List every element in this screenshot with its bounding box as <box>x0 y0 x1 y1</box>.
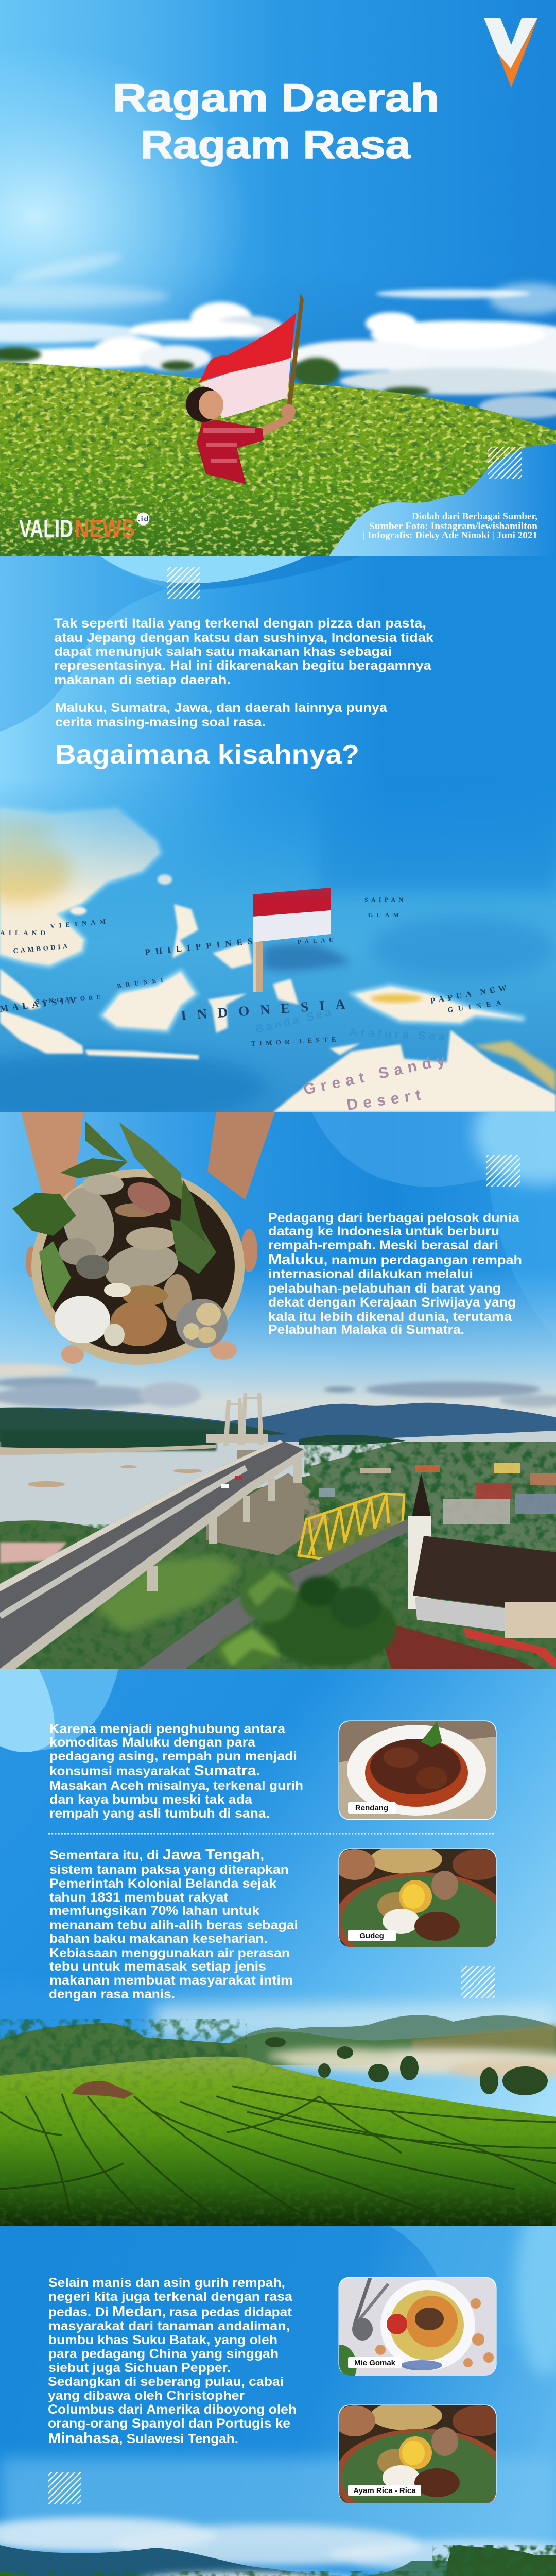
intro text: dapat menunjuk salah satu makanan khas sebagai <box>54 645 392 659</box>
foreground palms <box>216 1566 396 1669</box>
text: medan and minahasa: Sedangkan di seberang pulau, cabai <box>48 2375 284 2389</box>
card: ayam rica-rica <box>334 2401 509 2527</box>
card: mie gomak <box>339 2277 496 2376</box>
stripes <box>167 567 200 599</box>
map labels: Arafura Sea <box>349 1025 446 1043</box>
map labels: PALAU <box>297 936 334 945</box>
text: medan and minahasa: Columbus dari Amerika diboyong oleh <box>48 2402 297 2417</box>
credit text: | Infografis: Dieky Ade Ninoki | Juni 2021 <box>363 530 537 541</box>
clouds <box>0 2517 556 2571</box>
label: mie gomak: Mie Gomak <box>354 2359 396 2367</box>
ginger and spices <box>55 1174 228 1348</box>
text: medan and minahasa: yang dibawa oleh Christopher <box>48 2388 245 2403</box>
text: medan and minahasa: masyarakat dari tanaman andaliman, <box>48 2319 290 2333</box>
basket and hands <box>12 1112 275 1365</box>
text: jawa tengah: tebu untuk memasak setiap jenis <box>49 1959 266 1974</box>
town <box>304 1442 556 1550</box>
panel: hero <box>0 0 556 556</box>
credit text <box>363 511 537 541</box>
text: jawa tengah: makanan membuat masyarakat intim <box>49 1973 293 1988</box>
maluku text <box>268 1211 522 1337</box>
intro text: cerita masing-masing soal rasa. <box>55 715 266 730</box>
intro text: makanan di setiap daerah. <box>54 673 231 687</box>
mist <box>268 2048 556 2079</box>
map labels: AILAND <box>0 929 45 937</box>
maluku text: Pedagang dari berbagai pelosok dunia <box>268 1211 520 1225</box>
label: gudeg: Gudeg <box>359 1931 384 1940</box>
text: jawa tengah: memfungsikan 70% lahan untuk <box>49 1904 259 1918</box>
text: sumatra: konsumsi masyarakat Sumatra. <box>49 1762 260 1779</box>
sky wisps <box>0 249 556 314</box>
text: medan and minahasa: bumbu khas Suku Batak, yang oleh <box>48 2333 277 2347</box>
maluku text: datang ke Indonesia untuk berburu <box>268 1224 499 1239</box>
sky <box>0 1081 556 1669</box>
text: medan and minahasa: orang-orang Spanyol dan Portugis ke <box>48 2416 290 2431</box>
label: mie gomak <box>348 2357 402 2368</box>
text: jawa tengah: Kebiasaan menggunakan air perasan <box>49 1946 290 1960</box>
map labels: GUAM <box>368 911 399 919</box>
text: jawa tengah: sistem tanam paksa yang diterapkan <box>49 1862 289 1877</box>
stripes <box>486 1155 520 1187</box>
mist <box>139 2573 366 2576</box>
stripes <box>48 2472 81 2504</box>
map labels: GUINEA <box>447 999 502 1014</box>
map labels: SAIPAN <box>364 896 403 903</box>
intro text: Tak seperti Italia yang terkenal dengan pizza dan pasta, <box>54 616 426 631</box>
label: ayam rica-rica: Ayam Rica - Rica <box>353 2486 416 2495</box>
river under bridge <box>206 1473 329 1555</box>
forest <box>0 2571 463 2576</box>
far shore <box>0 1429 406 1455</box>
panel: medan and minahasa <box>0 2226 556 2576</box>
yellow truss bridge <box>299 1494 404 1561</box>
credit wave <box>328 444 556 556</box>
land lower <box>0 1442 556 1669</box>
map labels: SINGAPORE <box>36 993 101 1005</box>
leaves <box>12 1121 216 1308</box>
text: jawa tengah: bahan baku makanan keseharian. <box>49 1931 268 1946</box>
title: Ragam Daerah <box>113 76 439 120</box>
title: Ragam Rasa <box>141 123 411 167</box>
map labels: PAPUA NEW <box>430 984 507 1006</box>
question heading: Bagaimana kisahnya? <box>55 740 359 770</box>
icon: V logo <box>484 18 537 88</box>
left hills <box>0 2023 247 2081</box>
bridge <box>0 1440 305 1669</box>
hero sky <box>0 0 556 556</box>
water <box>0 1431 556 1530</box>
trees and rock <box>72 2037 548 2099</box>
road lower <box>139 1519 407 1669</box>
map labels: CAMBODIA <box>13 942 68 955</box>
text: medan and minahasa <box>48 2276 297 2447</box>
map labels <box>0 896 507 1114</box>
flag pin <box>253 888 350 992</box>
text: sumatra: pedagang asing, rempah pun menjadi <box>49 1749 297 1764</box>
logo: validnews: .id <box>138 515 148 523</box>
text: jawa tengah: tahun 1831 membuat rakyat <box>49 1890 229 1905</box>
clouds <box>0 289 556 418</box>
map labels: TIMOR-LESTE <box>251 1035 336 1047</box>
panel: sumatra and jawa <box>0 1669 556 2226</box>
text: jawa tengah: dengan rasa manis. <box>49 1987 175 2002</box>
text: sumatra: komoditas Maluku dengan para <box>49 1735 256 1750</box>
flag and woman <box>186 293 304 484</box>
maluku text: internasional dilakukan melalui <box>268 1267 473 1281</box>
logo: validnews: VALID <box>19 515 73 543</box>
card: rendang <box>339 1721 496 1820</box>
maluku text: dekat dengan Kerajaan Sriwijaya yang <box>268 1295 516 1310</box>
mountains <box>0 2545 463 2576</box>
label: gudeg <box>348 1930 396 1941</box>
card: gudeg <box>339 1849 496 1947</box>
map labels: Great Sandy <box>302 1052 447 1098</box>
text: medan and minahasa: siebut juga Sichuan Pepper. <box>48 2361 231 2375</box>
map labels: PHILIPPINES <box>144 936 253 957</box>
background <box>0 1669 556 2226</box>
credit text: Diolah dari Berbagai Sumber, <box>412 511 537 522</box>
panel: intro and map <box>0 556 556 1112</box>
tea plantation photo <box>0 2015 556 2226</box>
text: sumatra: rempah yang asli tumbuh di sana. <box>49 1806 270 1821</box>
maluku text: rempah-rempah. Meski berasal dari <box>268 1238 498 1252</box>
mountains <box>227 2015 556 2065</box>
intro text <box>54 616 433 730</box>
hillside of tea <box>0 347 556 556</box>
stripes <box>461 1966 495 1998</box>
land: islands <box>0 874 556 1112</box>
map labels: VIETNAM <box>50 918 106 930</box>
text: jawa tengah: Sementara itu, di Jawa Tengah , <box>49 1846 264 1863</box>
church <box>376 1473 556 1669</box>
maluku text: pelabuhan-pelabuhan di barat yang <box>268 1281 501 1296</box>
logo: validnews <box>19 512 149 543</box>
text: medan and minahasa: Minahasa, Sulawesi Tengah. <box>48 2430 238 2447</box>
label: rendang: Rendang <box>355 1804 388 1812</box>
panel: maluku <box>0 1112 556 2576</box>
intro background <box>0 556 556 1113</box>
text: sumatra: Karena menjadi penghubung antara <box>49 1722 286 1736</box>
text: jawa tengah <box>49 1846 298 2002</box>
fields <box>0 2057 556 2226</box>
terrace lines <box>0 2086 556 2225</box>
text: medan and minahasa: negeri kita juga terkenal dengan rasa <box>48 2290 293 2304</box>
title <box>113 76 439 167</box>
intro text: atau Jepang dengan katsu dan sushinya, Indonesia tidak <box>54 631 433 645</box>
text: medan and minahasa: Selain manis dan asin gurih rempah, <box>48 2276 285 2290</box>
text: sumatra: Masakan Aceh misalnya, terkenal gurih <box>49 1778 303 1793</box>
pylons <box>206 1393 268 1459</box>
intro text: representasinya. Hal ini dikarenakan begitu beragamnya <box>54 658 432 673</box>
background <box>0 2200 556 2576</box>
label: rendang <box>348 1802 396 1814</box>
map labels: MALAYSIA <box>0 994 75 1014</box>
logo: validnews: NEWS <box>75 515 135 543</box>
land: asia mainland <box>0 809 160 965</box>
map photo <box>0 773 556 1123</box>
land: coastal halo <box>0 809 525 1030</box>
intro text: Maluku, Sumatra, Jawa, dan daerah lainnya punya <box>55 701 388 715</box>
maluku text: Pelabuhan Malaka di Sumatra. <box>268 1323 464 1337</box>
label: ayam rica-rica <box>348 2485 421 2496</box>
text: sumatra: dan kaya bumbu meski tak ada <box>49 1792 253 1807</box>
sky clouds <box>0 1364 556 1408</box>
map labels: INDONESIA <box>180 996 346 1023</box>
map labels: BRUNEI <box>116 976 164 990</box>
text: jawa tengah: menanam tebu alih-alih beras sebagai <box>49 1918 298 1933</box>
text: medan and minahasa: para pedagang China yang singgah <box>48 2347 279 2361</box>
sandbars <box>28 1465 202 1487</box>
map labels: Banda Sea <box>254 1006 333 1036</box>
maluku text: Maluku , namun perdagangan rempah <box>268 1251 522 1268</box>
credit text: Sumber Foto: Instagram/lewishamilton <box>369 521 537 532</box>
distant hills <box>0 1403 556 1442</box>
text: medan and minahasa: pedas. Di Medan, rasa pedas didapat <box>48 2303 292 2320</box>
text: sumatra <box>49 1722 303 1821</box>
toraja landscape photo <box>0 2517 556 2576</box>
maluku text: kala itu lebih dikenal dunia, terutama <box>268 1310 512 1324</box>
text: jawa tengah: Pemerintah Kolonial Belanda sejak <box>49 1876 276 1891</box>
